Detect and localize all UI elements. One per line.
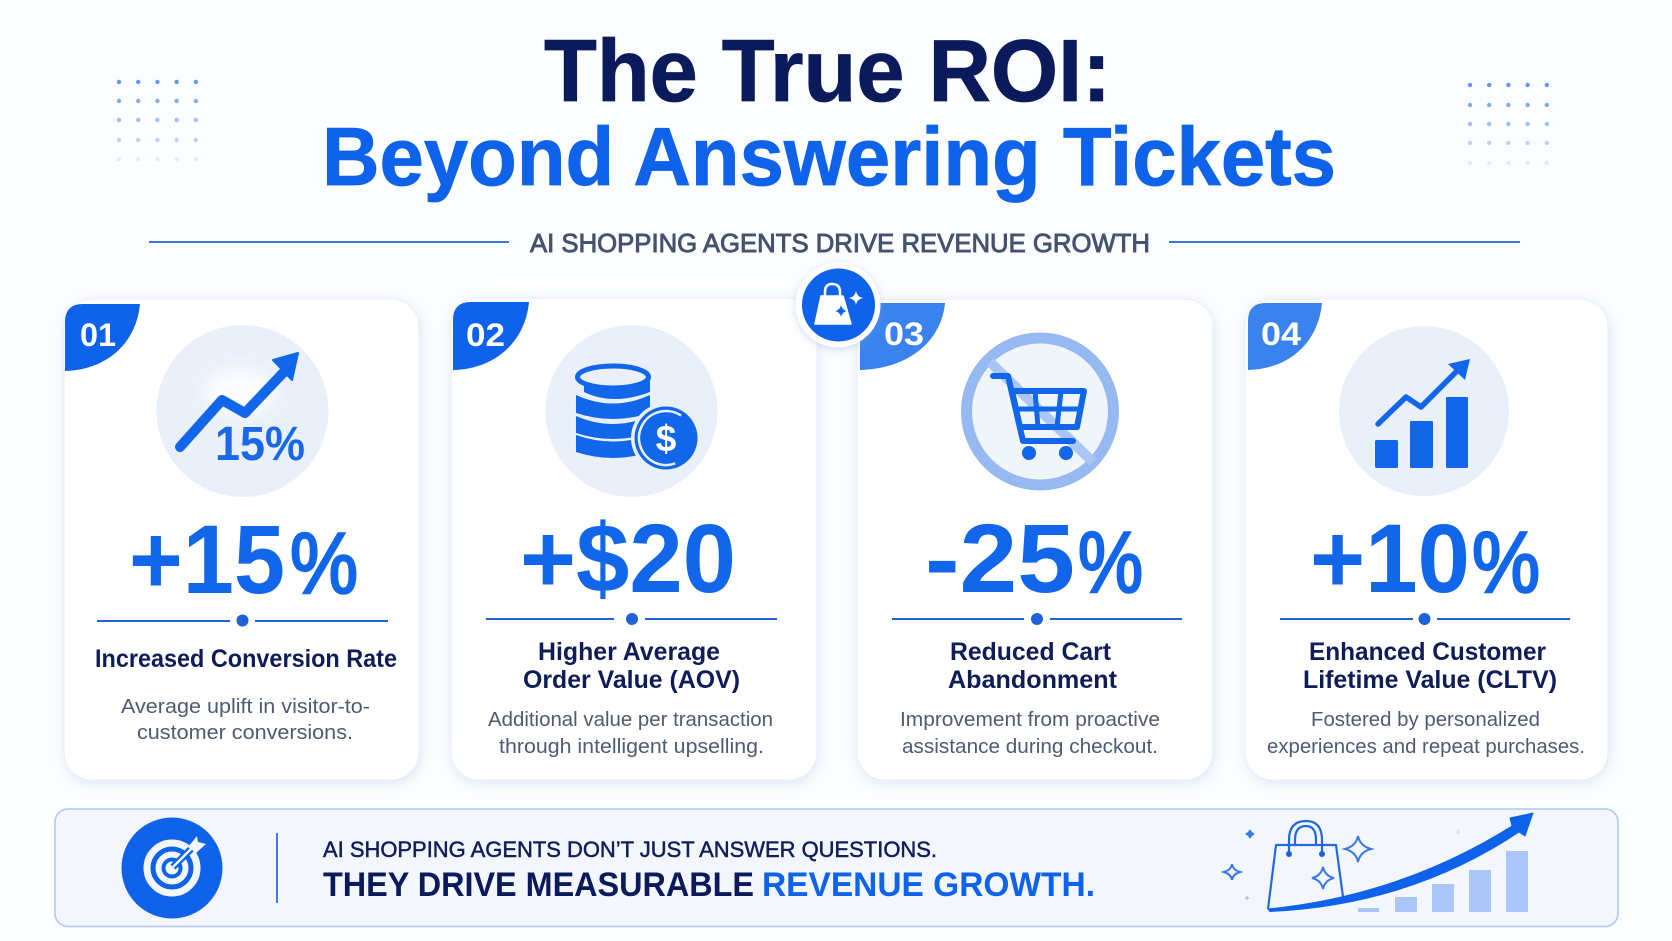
banner message: REVENUE GROWTH. (762, 866, 1095, 904)
description: Additional value per transaction (488, 708, 773, 731)
arrow: growth curve (1268, 813, 1533, 912)
heading: Enhanced Customer (1309, 638, 1546, 666)
badge 01 (65, 304, 140, 371)
badge 04: 04 (1261, 316, 1301, 352)
title: Beyond Answering Tickets (322, 110, 1336, 203)
badge 02 (453, 302, 529, 370)
description: Average uplift in visitor-to- (121, 695, 370, 718)
stat +10%: +10 (1310, 504, 1470, 613)
description: Improvement from proactive (900, 708, 1160, 731)
dot pattern: left (119, 82, 197, 159)
panel: card 4 lifetime value (1245, 299, 1608, 780)
icon: outlined bag (1268, 821, 1343, 909)
description: through intelligent upselling. (499, 735, 764, 758)
icon: coin stack with dollar: $ (656, 418, 677, 459)
description (1267, 708, 1585, 758)
icon: rising arrow with 15% (156, 325, 328, 497)
chart: rising bars and shopping bag (1224, 813, 1533, 912)
panel: card 3 cart abandonment (857, 299, 1213, 780)
heading: Increased Conversion Rate (95, 645, 397, 673)
badge 03 (860, 303, 945, 370)
panel: card 1 conversion rate (64, 299, 419, 780)
heading: Reduced Cart (950, 638, 1112, 666)
icon: shopping bag centre badge (796, 262, 880, 348)
stat -25%: -25 (925, 504, 1075, 613)
divider (486, 613, 777, 625)
heading (1303, 638, 1557, 694)
heading (523, 638, 740, 694)
stat +15%: % (290, 516, 358, 612)
icon: crossed-out cart (966, 338, 1114, 485)
panel: card 2 order value (451, 298, 817, 780)
heading: Higher Average (538, 638, 720, 666)
stat +15%: +15 (129, 505, 285, 614)
dot pattern: right (1470, 85, 1548, 163)
banner message (323, 837, 1095, 904)
heading: Abandonment (948, 666, 1118, 694)
heading: Lifetime Value (CLTV) (1303, 666, 1557, 694)
title (322, 21, 1336, 203)
description (900, 708, 1160, 758)
description: experiences and repeat purchases. (1267, 735, 1585, 758)
panel: bottom banner (55, 809, 1618, 926)
badge 03: 03 (884, 316, 924, 352)
icon: bar chart with arrow (1339, 326, 1509, 496)
banner message: THEY DRIVE MEASURABLE (323, 866, 754, 904)
stat +10%: % (1472, 515, 1540, 611)
divider (97, 614, 388, 626)
badge 02: 02 (466, 317, 505, 353)
badge 04 (1248, 303, 1322, 370)
stat +$20: +$20 (520, 504, 736, 613)
description (488, 708, 773, 758)
subtitle with rules: AI SHOPPING AGENTS DRIVE REVENUE GROWTH (530, 228, 1150, 258)
sparkles (1224, 828, 1461, 901)
badge 01: 01 (80, 317, 116, 353)
icon: rising arrow with 15%: 15% (215, 418, 305, 471)
title: The True ROI: (544, 21, 1111, 120)
banner message: AI SHOPPING AGENTS DON’T JUST ANSWER QUESTIONS. (323, 837, 937, 862)
stat -25%: % (1078, 515, 1143, 611)
divider (892, 613, 1182, 625)
description (121, 695, 370, 744)
heading: Order Value (AOV) (523, 666, 740, 694)
description: assistance during checkout. (902, 735, 1158, 758)
heading (948, 638, 1118, 694)
description: customer conversions. (137, 721, 353, 744)
description: Fostered by personalized (1311, 708, 1540, 731)
icon: coin stack with dollar (546, 325, 718, 497)
vertical divider (276, 833, 278, 903)
icon: target with arrow (122, 818, 222, 918)
divider (1280, 613, 1570, 625)
